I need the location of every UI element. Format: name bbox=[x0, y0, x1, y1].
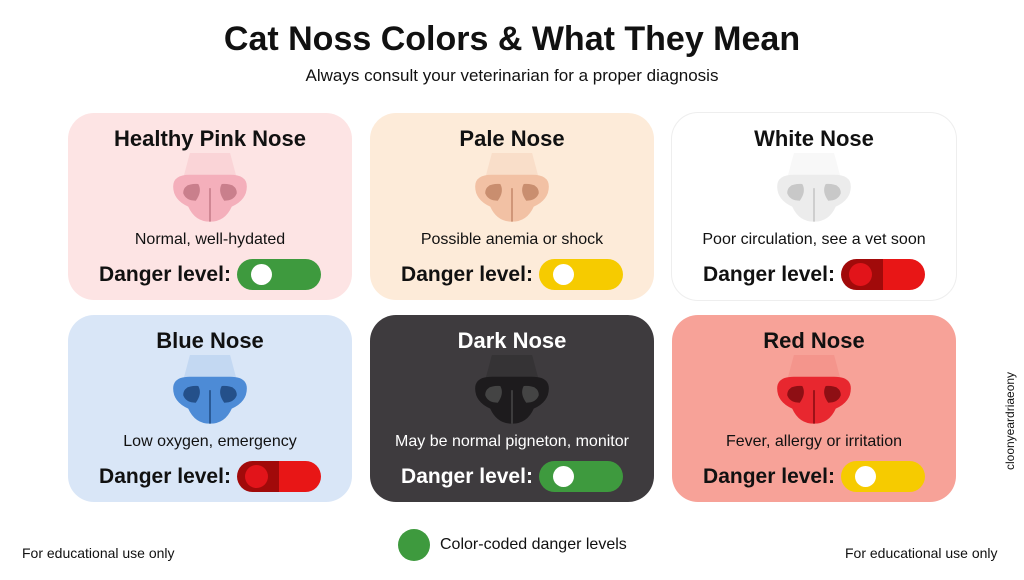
danger level bbox=[703, 259, 925, 290]
legend bbox=[398, 529, 627, 561]
danger level: Danger level: bbox=[703, 262, 835, 286]
panel: dark bbox=[370, 315, 654, 502]
panel: blue: Blue Nose bbox=[156, 328, 264, 353]
panel: white: White Nose bbox=[754, 126, 874, 151]
panel: white bbox=[672, 113, 956, 300]
panel: healthy pink bbox=[68, 113, 352, 300]
danger level bbox=[99, 259, 321, 290]
icon: red nose bbox=[777, 355, 851, 424]
footer right: For educational use only bbox=[845, 545, 998, 561]
subtitle: Always consult your veterinarian for a proper diagnosis bbox=[306, 66, 718, 85]
panel: red bbox=[672, 315, 956, 502]
danger level: Danger level: bbox=[703, 464, 835, 488]
danger level: Danger level: bbox=[99, 464, 231, 488]
panel: pale bbox=[370, 113, 654, 300]
legend: Color-coded danger levels bbox=[440, 536, 627, 553]
title: Cat Noss Colors & What They Mean bbox=[224, 20, 800, 58]
danger level: Danger level: bbox=[99, 262, 231, 286]
text: Low oxygen, emergency bbox=[123, 433, 297, 450]
panel: blue bbox=[68, 315, 352, 502]
panel: red: Red Nose bbox=[763, 328, 865, 353]
danger level bbox=[703, 461, 925, 492]
icon: blue nose bbox=[173, 355, 247, 424]
panel: healthy pink: Healthy Pink Nose bbox=[114, 126, 306, 151]
text: Normal, well-hydated bbox=[135, 231, 285, 248]
danger level bbox=[401, 259, 623, 290]
danger level: Danger level: bbox=[401, 262, 533, 286]
danger level bbox=[99, 461, 321, 492]
danger level bbox=[401, 461, 623, 492]
footer left: For educational use only bbox=[22, 545, 175, 561]
text: May be normal pigneton, monitor bbox=[395, 433, 629, 450]
danger level: Danger level: bbox=[401, 464, 533, 488]
panel: pale: Pale Nose bbox=[459, 126, 565, 151]
icon: pale nose bbox=[475, 153, 549, 222]
text: Fever, allergy or irritation bbox=[726, 433, 902, 450]
icon: dark nose bbox=[475, 355, 549, 424]
vertical side text: cloonyeardriaeony bbox=[1003, 372, 1017, 470]
icon: pink nose bbox=[173, 153, 247, 222]
text: Poor circulation, see a vet soon bbox=[702, 231, 926, 248]
text: Possible anemia or shock bbox=[421, 231, 603, 248]
panel: dark: Dark Nose bbox=[458, 328, 566, 353]
icon: white nose bbox=[777, 174, 851, 222]
